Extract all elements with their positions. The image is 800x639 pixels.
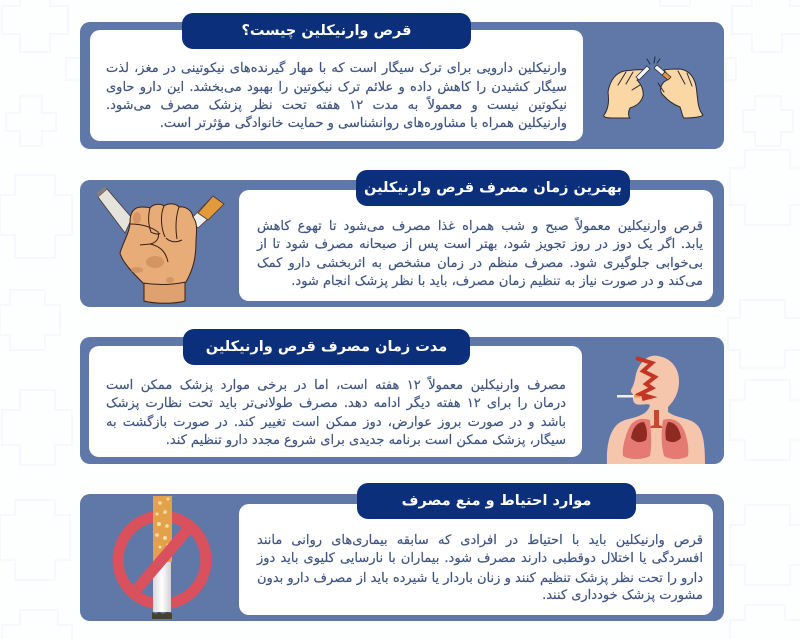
text block 1: وارنیکلین همراه با مشاوره‌های روانشناسی و حمایت خانوادگی مؤثرتر است.: [160, 116, 567, 131]
heading: duration of use: [183, 329, 470, 365]
white text card 1: [90, 30, 583, 141]
text block 3: [106, 376, 566, 448]
text block 4: افسردگی یا اختلال دوقطبی دارند مصرف شود. بیماران با نارسایی کلیوی باید دوز: [257, 551, 703, 566]
text block 1: نیکوتین نیست و معمولاً به مدت ۱۲ هفته تحت نظر پزشک مصرف می‌شود.: [106, 98, 567, 113]
white text card 3: [89, 346, 582, 457]
white text card 2: [239, 190, 713, 301]
white text card 4: [239, 504, 713, 615]
text block 1: [106, 60, 567, 131]
heading: cautions and contraindications: موارد احتیاط و منع مصرف: [402, 493, 591, 509]
text block 4: دارو را تحت نظر پزشک تنظیم کنند و زنان باردار یا شیرده باید از مصرف دارو بدون: [257, 571, 703, 586]
text block 2: یابد. اگر یک دوز در روز تجویز شود، بهتر است پس از صبحانه مصرف شود تا از: [257, 237, 703, 252]
text block 3: مصرف وارنیکلین معمولاً ۱۲ هفته است، اما در برخی موارد پزشک ممکن است: [106, 378, 566, 393]
heading: best time to take: [356, 170, 630, 206]
text block 3: سیگار، پزشک ممکن است برنامه جدیدی برای شروع مجدد دارو تنظیم کند.: [166, 433, 566, 448]
heading: what is varenicline: قرص وارنیکلین چیست؟: [241, 23, 412, 39]
panel: best time to take: [80, 180, 724, 307]
heading: cautions and contraindications: [357, 483, 636, 519]
text block 3: درمان را برای ۱۲ هفته دیگر ادامه دهد. مصرف طولانی‌تر باید تحت نظارت پزشک: [106, 396, 566, 411]
heading: best time to take: بهترین زمان مصرف قرص وارنیکلین: [364, 180, 622, 196]
text block 2: قرص وارنیکلین معمولاً صبح و شب همراه غذا مصرف می‌شود تا تهوع کاهش: [257, 219, 703, 234]
text block 4: [256, 533, 703, 603]
text block 2: [256, 217, 703, 289]
panel: cautions and contraindications: [80, 494, 724, 621]
heading: duration of use: مدت زمان مصرف قرص وارنیکلین: [206, 339, 447, 355]
text block 1: وارنیکلین دارویی برای ترک سیگار است که با مهار گیرنده‌های نیکوتینی در مغز، لذت: [106, 61, 567, 76]
text block 4: مشورت پزشک خودداری کنند.: [542, 588, 703, 603]
text block 2: می‌کند و در صورت نیاز به تنظیم زمان مصرف، باید با نظر پزشک انجام شود.: [291, 274, 703, 289]
text block 2: بی‌خوابی جلوگیری شود. مصرف منظم در زمان مشخص به اثربخشی دارو کمک: [257, 256, 703, 271]
text block 3: باشد و در صورت بروز عوارض، دوز ممکن است تغییر کند. در صورت بازگشت به: [106, 415, 566, 430]
panel: what is varenicline: [80, 22, 724, 149]
text block 1: سیگار کشیدن را کاهش داده و علائم ترک نیکوتین را بهبود می‌بخشد. این دارو حاوی: [106, 80, 567, 95]
text block 4: قرص وارنیکلین باید با احتیاط در افرادی که سابقه بیماری‌های روانی مانند: [257, 533, 703, 548]
heading: what is varenicline: [182, 13, 471, 49]
panel: duration of use: [80, 337, 724, 464]
